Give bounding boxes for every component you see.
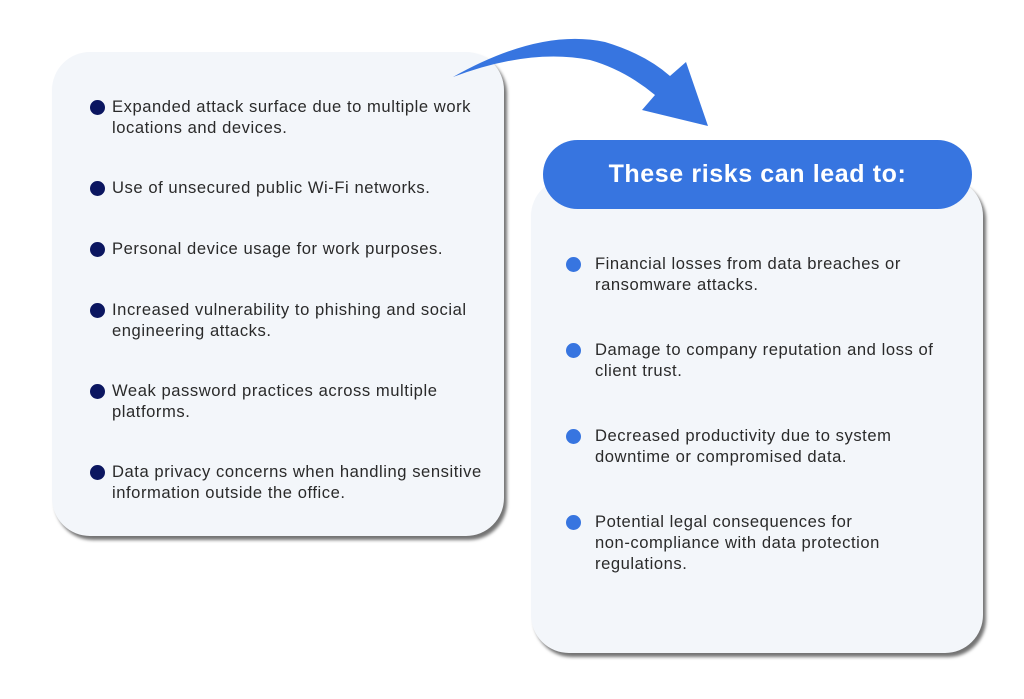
panel: consequences <box>531 178 983 653</box>
item 1: Financial losses from data breaches or <box>595 254 901 273</box>
list: consequences <box>566 254 933 573</box>
list: risks <box>90 97 482 502</box>
item 2: Use of unsecured public Wi-Fi networks. <box>112 178 430 197</box>
item 6: information outside the office. <box>112 483 346 502</box>
item 4: engineering attacks. <box>112 321 272 340</box>
item 1: ransomware attacks. <box>595 275 759 294</box>
item 3: Decreased productivity due to system <box>595 426 892 445</box>
item 4 <box>90 300 467 340</box>
item 2 <box>566 340 933 380</box>
item 3 <box>566 426 892 466</box>
heading pill <box>543 140 972 209</box>
item 5: platforms. <box>112 402 190 421</box>
item 4: non-compliance with data protection <box>595 533 880 552</box>
item 5 <box>90 381 437 421</box>
heading pill: These risks can lead to: <box>609 160 906 188</box>
item 3: Personal device usage for work purposes. <box>112 239 443 258</box>
panel: remote work risks <box>52 52 504 536</box>
item 1: locations and devices. <box>112 118 287 137</box>
item 6 <box>90 462 482 502</box>
item 6: Data privacy concerns when handling sensitive <box>112 462 482 481</box>
item 1: Expanded attack surface due to multiple work <box>112 97 471 116</box>
item 4 <box>566 512 880 573</box>
item 4: Increased vulnerability to phishing and social <box>112 300 467 319</box>
item 1 <box>566 254 901 294</box>
item 5: Weak password practices across multiple <box>112 381 437 400</box>
item 4: regulations. <box>595 554 687 573</box>
item 2: Damage to company reputation and loss of <box>595 340 933 359</box>
item 3: downtime or compromised data. <box>595 447 847 466</box>
item 2: client trust. <box>595 361 682 380</box>
item 1 <box>90 97 471 137</box>
item 4: Potential legal consequences for <box>595 512 852 531</box>
